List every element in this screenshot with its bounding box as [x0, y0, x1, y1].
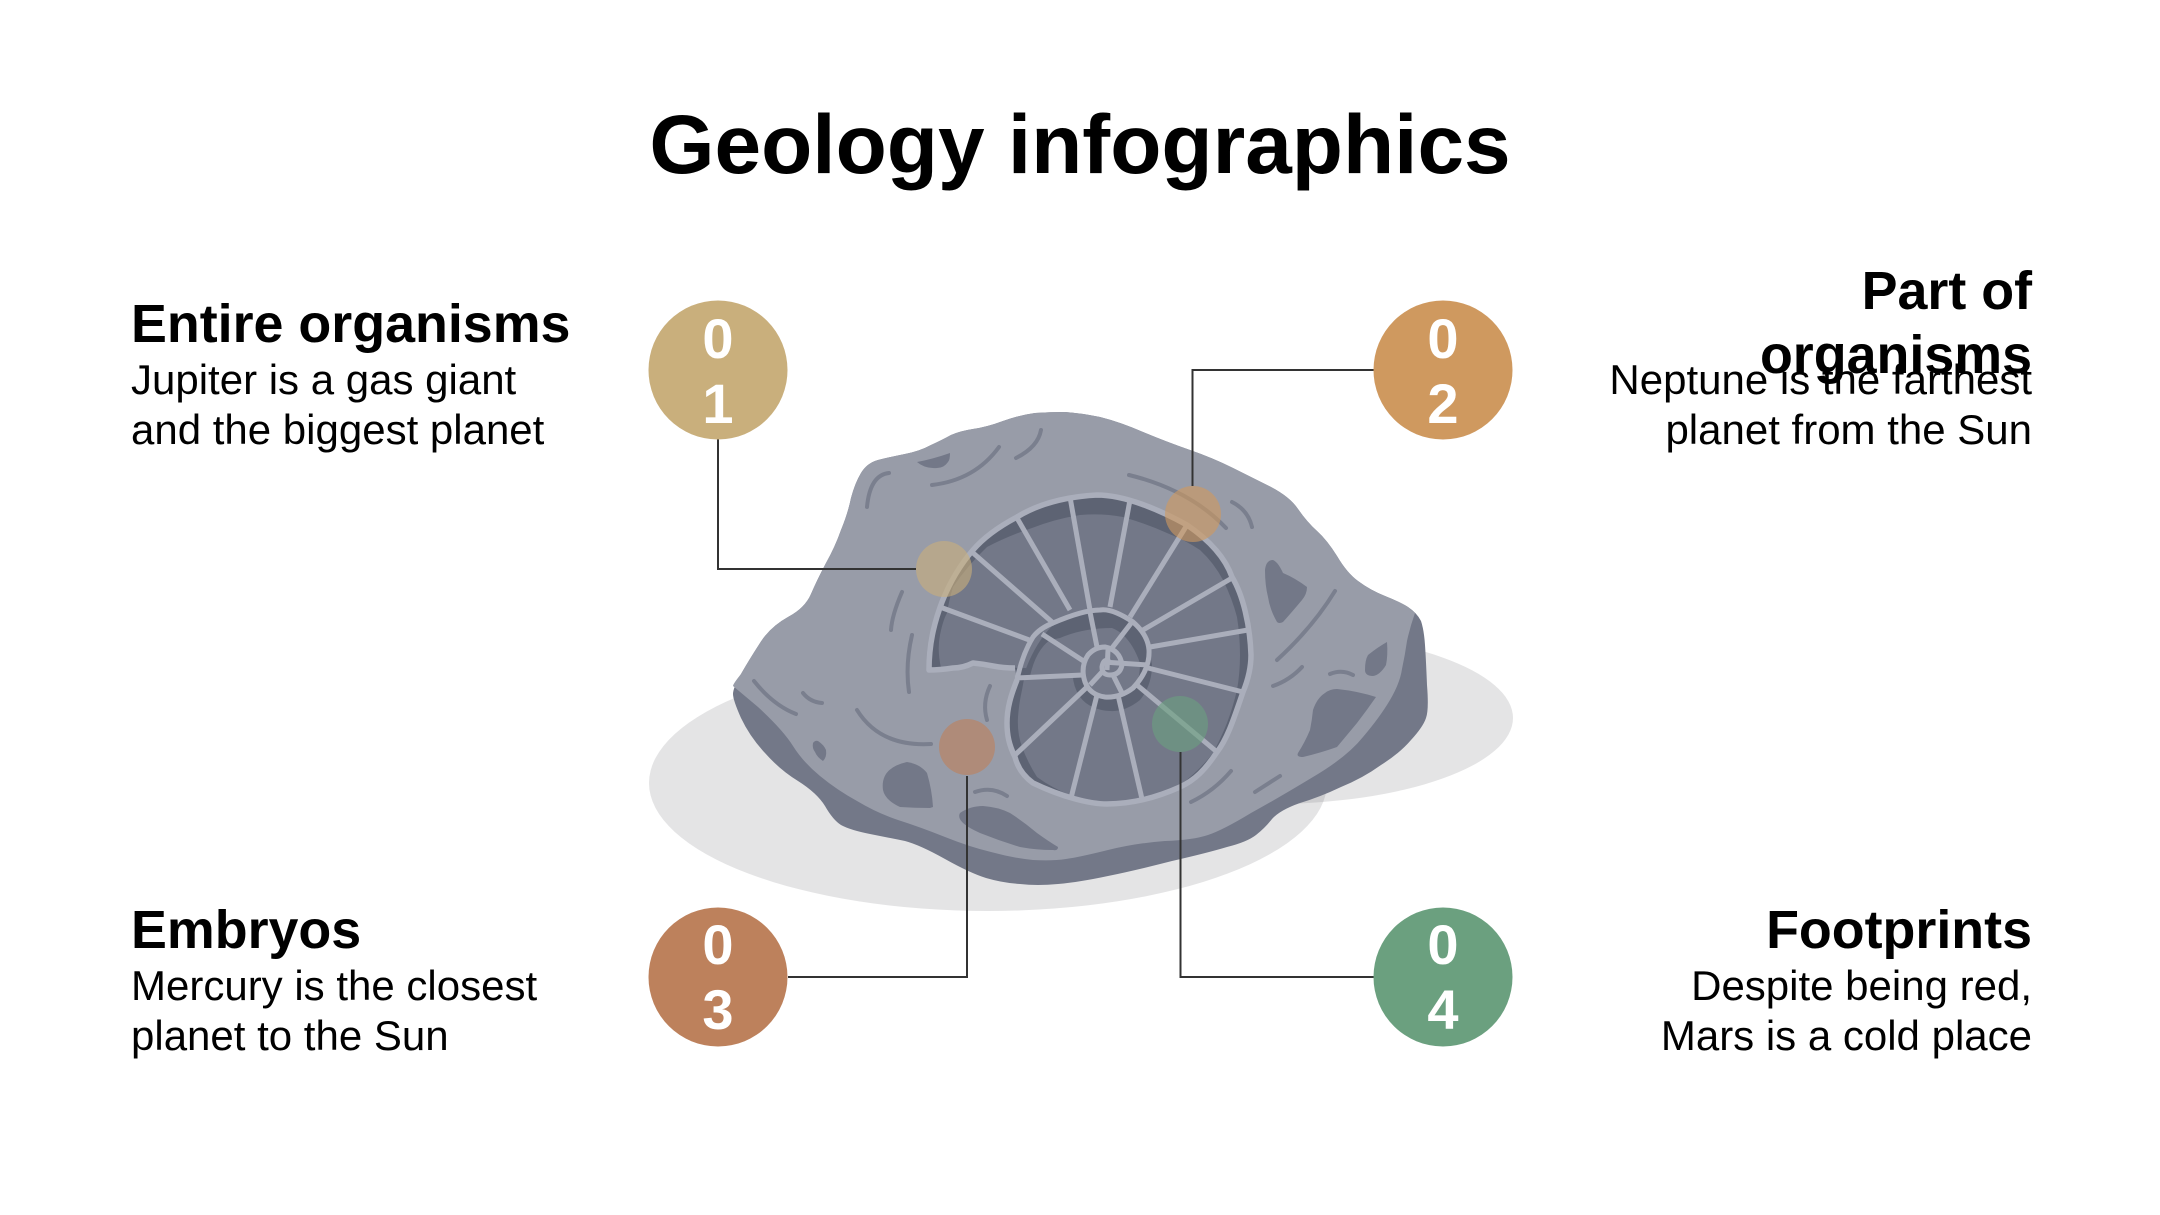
number badge 03 [648, 908, 788, 1046]
text block: entire organisms [131, 294, 570, 453]
text block: entire organisms: and the biggest planet [131, 406, 545, 453]
marker dot 03 [939, 719, 995, 775]
text block: footprints: Despite being red, [1691, 962, 2032, 1009]
connector 03 [788, 776, 967, 977]
text block: footprints [1661, 900, 2032, 1059]
connector 02 [1192, 370, 1374, 486]
ammonite fossil [929, 495, 1251, 804]
number badge 04: 4 [1427, 978, 1459, 1041]
rock surface grooves [754, 430, 1353, 802]
number badge 01 [648, 300, 788, 440]
text block: embryos [131, 900, 537, 1059]
text block: embryos: Mercury is the closest [131, 962, 537, 1009]
rock top surface [733, 412, 1415, 860]
number badge 03: 0 [702, 913, 734, 976]
rock surface spots [813, 453, 1387, 850]
number badge 04: 0 [1427, 913, 1459, 976]
title: Geology infographics [649, 97, 1511, 191]
fossil shell [929, 495, 1251, 804]
number badge 04 [1374, 908, 1512, 1046]
text block: entire organisms: Jupiter is a gas giant [131, 356, 517, 403]
connector 04 [1180, 752, 1374, 977]
text block: entire organisms: Entire organisms [131, 294, 570, 354]
fossil spiral [1017, 610, 1149, 697]
connector 01 [718, 439, 916, 569]
text block: footprints: Footprints [1766, 900, 2032, 960]
marker dot 02 [1165, 486, 1221, 542]
text block: part of organisms: Neptune is the farthest [1609, 356, 2032, 403]
inner whorl dark band [1022, 610, 1152, 711]
text block: embryos: Embryos [131, 900, 361, 960]
text block: part of organisms [1609, 261, 2033, 453]
number badge 01: 1 [702, 372, 734, 435]
inner whorl chamber [1030, 628, 1140, 697]
fossil outer shell outline [929, 495, 1251, 804]
number badge 02: 0 [1427, 307, 1459, 370]
rock base [733, 412, 1428, 885]
text block: part of organisms: Part of [1862, 261, 2033, 321]
text block: footprints: Mars is a cold place [1661, 1012, 2032, 1059]
text block: part of organisms: organisms [1760, 325, 2032, 385]
ground shadows [649, 632, 1513, 911]
marker dot 01 [916, 541, 972, 597]
number badge 03: 3 [702, 978, 734, 1041]
number badge 02: 2 [1427, 372, 1459, 435]
rock illustration [733, 412, 1428, 885]
number badge 02 [1374, 300, 1512, 440]
fossil chamber fill [939, 514, 1240, 802]
number badge 01: 0 [702, 307, 734, 370]
fossil ribs [940, 497, 1248, 799]
marker dot 04 [1152, 696, 1208, 752]
text block: embryos: planet to the Sun [131, 1012, 449, 1059]
text block: part of organisms: planet from the Sun [1665, 406, 2032, 453]
